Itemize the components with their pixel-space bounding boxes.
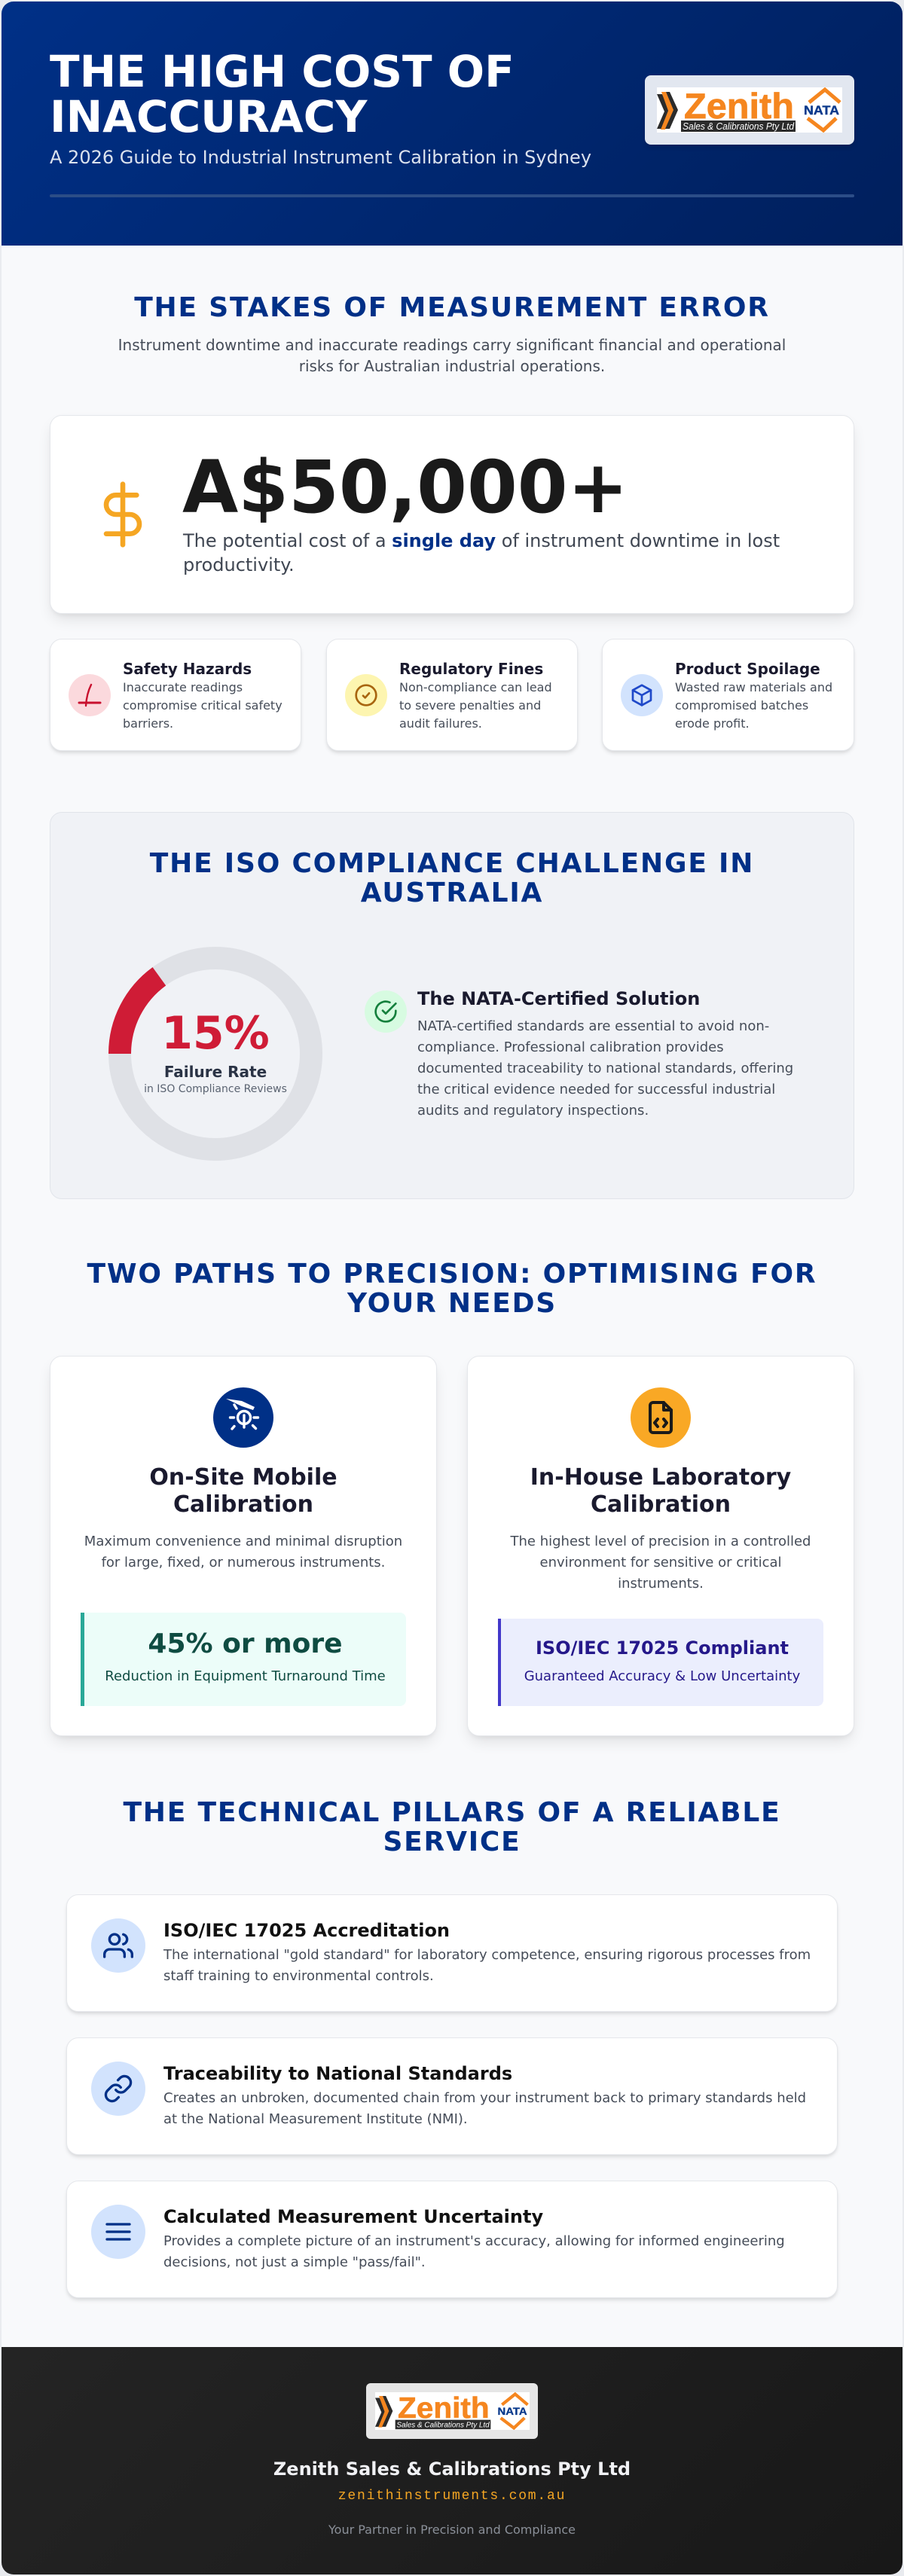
NATA solution text: documented traceability to national standards, offering <box>417 1061 793 1076</box>
panel: ISO compliance challenge <box>50 812 854 1199</box>
uncertainty text: Calculated Measurement Uncertainty <box>163 2206 543 2227</box>
uncertainty text: decisions, not just a simple "pass/fail". <box>163 2254 426 2270</box>
in-house title: Calibration <box>591 1491 731 1518</box>
panel: on-site mobile calibration <box>50 1356 437 1736</box>
in-house description: instruments. <box>618 1576 704 1592</box>
spoilage text: compromised batches <box>675 698 808 713</box>
donut label <box>144 1007 287 1095</box>
icon: menu lines <box>91 2205 145 2259</box>
accreditation text: ISO/IEC 17025 Accreditation <box>163 1920 450 1941</box>
icon: link <box>91 2062 145 2116</box>
stakes intro text <box>118 336 786 375</box>
on-site description: for large, fixed, or numerous instruments. <box>102 1555 385 1570</box>
heading: ISO compliance: THE ISO COMPLIANCE CHALLENGE IN <box>150 848 754 879</box>
icon: dollar <box>104 481 142 548</box>
donut label: Failure Rate <box>164 1063 267 1081</box>
NATA solution text <box>417 988 793 1119</box>
accreditation text: The international "gold standard" for laboratory competence, ensuring rigorous processes from <box>163 1947 811 1963</box>
on-site description <box>84 1534 402 1570</box>
safety text <box>123 660 282 731</box>
cost figure: A$50,000+ <box>182 445 628 530</box>
panel: regulatory fines <box>326 639 578 751</box>
in-house description <box>510 1534 811 1592</box>
safety text: Safety Hazards <box>123 660 252 678</box>
stakes intro text: risks for Australian industrial operations. <box>299 357 605 375</box>
icon: tools <box>213 1387 273 1448</box>
in-house title <box>530 1464 791 1518</box>
regulatory text: to severe penalties and <box>399 698 541 713</box>
stakes intro text: Instrument downtime and inaccurate readings carry significant financial and operational <box>118 336 786 354</box>
uncertainty text <box>163 2206 785 2270</box>
header logo: NATA <box>804 104 839 118</box>
spoilage text <box>675 660 832 731</box>
spoilage text: Wasted raw materials and <box>675 680 832 694</box>
header divider <box>50 194 854 197</box>
regulatory text: Non-compliance can lead <box>399 680 552 694</box>
heading: ISO compliance: AUSTRALIA <box>361 877 543 908</box>
footer logo: Sales & Calibrations Pty Ltd <box>396 2422 490 2430</box>
traceability text: at the National Measurement Institute (NMI). <box>163 2111 468 2127</box>
header logo: Sales & Calibrations Pty Ltd <box>683 121 795 132</box>
traceability text: Traceability to National Standards <box>163 2063 512 2084</box>
metric label: Guaranteed Accuracy & Low Uncertainty <box>524 1668 800 1684</box>
panel: safety hazards <box>50 639 301 751</box>
cost description: productivity. <box>183 554 295 575</box>
icon: users <box>91 1918 145 1973</box>
traceability text: Creates an unbroken, documented chain from your instrument back to primary standards held <box>163 2090 806 2106</box>
NATA solution text: audits and regulatory inspections. <box>417 1103 649 1119</box>
on-site metric <box>81 1613 406 1706</box>
header banner <box>2 2 902 246</box>
in-house title: In-House Laboratory <box>530 1464 791 1491</box>
panel: in-house laboratory calibration <box>467 1356 854 1736</box>
NATA solution text: the critical evidence needed for successful industrial <box>417 1082 775 1097</box>
uncertainty text: Provides a complete picture of an instrument's accuracy, allowing for informed engineering <box>163 2233 785 2249</box>
panel: product spoilage <box>602 639 854 751</box>
icon: regulatory <box>345 674 387 716</box>
cost description <box>182 530 780 575</box>
icon: safety <box>69 674 111 716</box>
NATA solution text: The NATA-Certified Solution <box>417 988 700 1009</box>
donut ring <box>108 947 322 1161</box>
on-site title: On-Site Mobile <box>149 1464 337 1491</box>
icon: cube <box>621 674 663 716</box>
spoilage text: Product Spoilage <box>675 660 820 678</box>
accreditation text: staff training to environmental controls. <box>163 1968 434 1984</box>
title: THE HIGH COST OF <box>50 46 515 97</box>
title <box>50 46 515 142</box>
donut label: 15% <box>161 1007 270 1060</box>
in-house metric <box>498 1619 823 1706</box>
on-site title: Calibration <box>173 1491 313 1518</box>
heading: technical pillars <box>123 1797 781 1857</box>
heading: two paths: TWO PATHS TO PRECISION: OPTIMISING FOR <box>87 1259 817 1290</box>
title: INACCURACY <box>50 91 367 142</box>
accreditation text <box>163 1920 811 1984</box>
regulatory text: audit failures. <box>399 716 482 731</box>
in-house description: environment for sensitive or critical <box>539 1555 782 1570</box>
heading: technical pillars: THE TECHNICAL PILLARS OF A RELIABLE <box>123 1797 781 1828</box>
on-site description: Maximum convenience and minimal disruption <box>84 1534 402 1549</box>
panel: headline cost <box>50 415 854 614</box>
tagline: Your Partner in Precision and Compliance <box>328 2523 576 2537</box>
heading: two paths: YOUR NEEDS <box>347 1288 557 1319</box>
NATA solution text: compliance. Professional calibration provides <box>417 1039 724 1055</box>
metric label: Reduction in Equipment Turnaround Time <box>105 1668 386 1684</box>
panel: accreditation <box>66 1894 838 2012</box>
footer logo <box>366 2383 538 2439</box>
regulatory text: Regulatory Fines <box>399 660 543 678</box>
header logo <box>645 75 854 145</box>
heading: ISO compliance <box>149 848 754 908</box>
icon: file code <box>631 1387 691 1448</box>
company name: Zenith Sales & Calibrations Pty Ltd <box>273 2458 631 2480</box>
panel: traceability <box>66 2037 838 2155</box>
panel: uncertainty <box>66 2181 838 2298</box>
regulatory text <box>399 660 552 731</box>
heading: two paths <box>87 1259 817 1319</box>
donut chart <box>108 947 322 1161</box>
safety text: Inaccurate readings <box>123 680 243 694</box>
icon: check circle <box>365 990 407 1033</box>
safety text: barriers. <box>123 716 173 731</box>
safety text: compromise critical safety <box>123 698 282 713</box>
metric value: ISO/IEC 17025 Compliant <box>536 1637 789 1659</box>
on-site title <box>149 1464 337 1518</box>
spoilage text: erode profit. <box>675 716 750 731</box>
heading: stakes of measurement error: THE STAKES OF MEASUREMENT ERROR <box>134 292 770 323</box>
NATA solution text: NATA-certified standards are essential to avoid non- <box>417 1018 769 1034</box>
footer logo: NATA <box>498 2406 527 2417</box>
heading: technical pillars: SERVICE <box>383 1827 521 1857</box>
metric value: 45% or more <box>148 1628 343 1659</box>
cost description: The potential cost of a single day of instrument downtime in lost <box>183 530 780 551</box>
footer logo: Zenith <box>398 2392 490 2425</box>
donut label: in ISO Compliance Reviews <box>144 1083 287 1095</box>
subtitle: A 2026 Guide to Industrial Instrument Calibration in Sydney <box>50 147 591 168</box>
footer <box>2 2347 902 2574</box>
in-house description: The highest level of precision in a controlled <box>511 1534 811 1549</box>
website: zenithinstruments.com.au <box>338 2489 566 2504</box>
traceability text <box>163 2063 806 2127</box>
